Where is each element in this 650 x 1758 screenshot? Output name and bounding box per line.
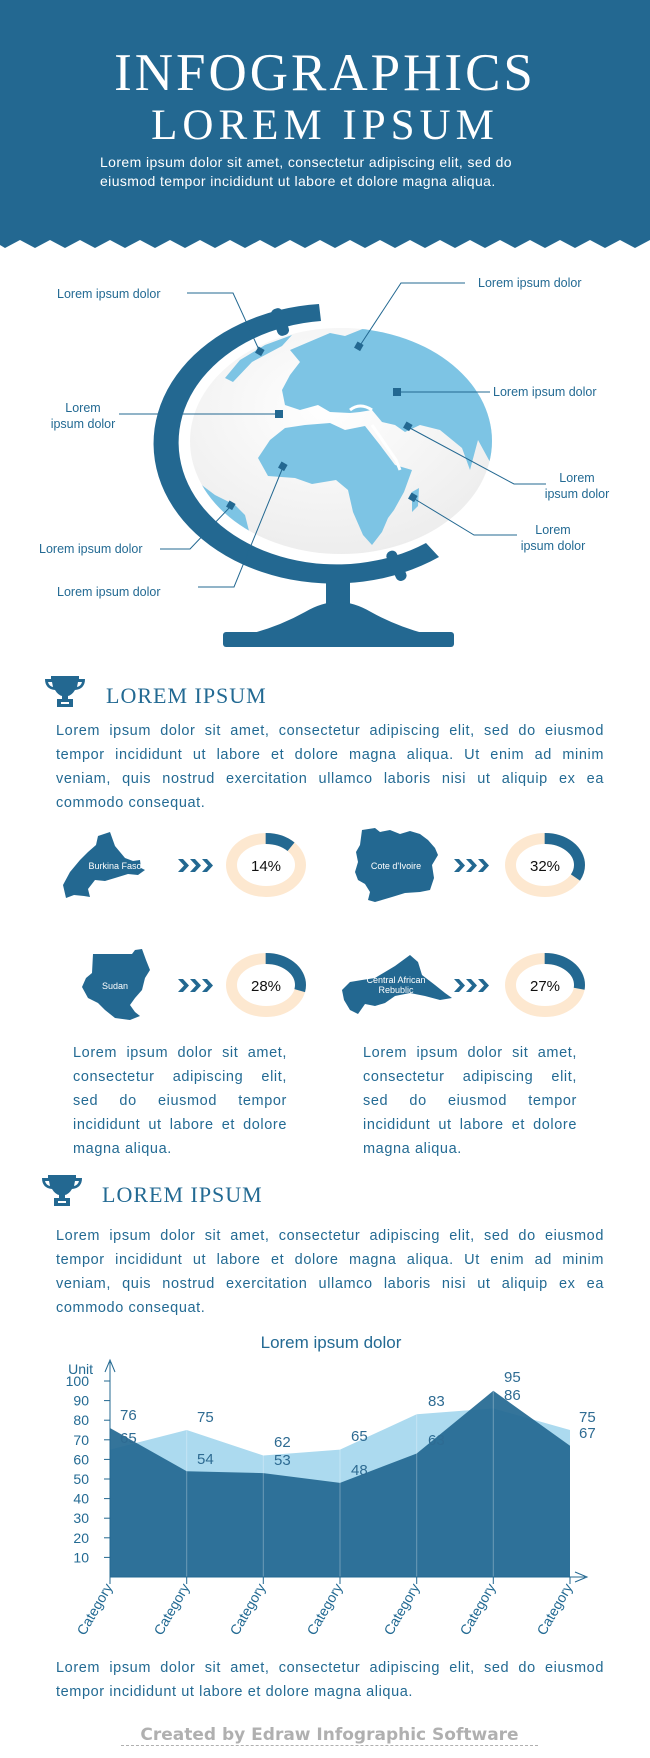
data labels: 75 bbox=[197, 1409, 214, 1426]
title: INFOGRAPHICS bbox=[114, 44, 536, 102]
Central African Republic: Rebublic bbox=[378, 985, 414, 995]
data labels: 86 bbox=[504, 1387, 521, 1404]
right column text bbox=[363, 1045, 577, 1157]
header banner bbox=[0, 0, 650, 248]
left column text: Lorem ipsum dolor sit amet, bbox=[73, 1045, 287, 1061]
globe illustration: Lorem bbox=[65, 401, 101, 415]
header intro text: eiusmod tempor incididunt ut labore et dolore magna aliqua. bbox=[100, 173, 496, 189]
y axis labels: 20 bbox=[73, 1530, 89, 1546]
data labels: 63 bbox=[428, 1432, 445, 1449]
section 2 paragraph: Lorem ipsum dolor sit amet, consectetur adipiscing elit, sed do eiusmod bbox=[56, 1228, 604, 1244]
country stats panel bbox=[63, 828, 585, 1020]
globe illustration: ipsum dolor bbox=[521, 539, 585, 553]
globe illustration bbox=[39, 276, 610, 647]
subtitle heading: LOREM IPSUM bbox=[151, 102, 499, 149]
bottom paragraph: Lorem ipsum dolor sit amet, consectetur adipiscing elit, sed do eiusmod bbox=[56, 1660, 604, 1676]
y axis labels: 80 bbox=[73, 1412, 89, 1428]
bottom paragraph: tempor incididunt ut labore et dolore magna aliqua. bbox=[56, 1684, 413, 1700]
globe stand ring bbox=[154, 304, 454, 647]
y axis labels: 50 bbox=[73, 1471, 89, 1487]
Burkina Faso bbox=[63, 832, 145, 898]
donut 28% bbox=[232, 958, 300, 1012]
data labels: 48 bbox=[351, 1462, 368, 1479]
globe illustration: Lorem ipsum dolor bbox=[39, 542, 143, 556]
area chart bbox=[66, 1333, 596, 1635]
donut 32%: 32% bbox=[530, 858, 560, 875]
data labels: 65 bbox=[351, 1428, 368, 1445]
left column text: sed do eiusmod tempor bbox=[73, 1093, 287, 1109]
globe illustration: Lorem ipsum dolor bbox=[478, 276, 582, 290]
header intro text: Lorem ipsum dolor sit amet, consectetur adipiscing elit, sed do bbox=[100, 154, 512, 170]
right column text: magna aliqua. bbox=[363, 1141, 462, 1157]
Sudan bbox=[82, 949, 150, 1020]
callout labels with leader lines bbox=[119, 283, 546, 587]
Central African Republic bbox=[342, 955, 452, 1014]
Sudan: Sudan bbox=[102, 981, 128, 991]
globe illustration: Lorem ipsum dolor bbox=[57, 287, 161, 301]
category labels bbox=[73, 1580, 576, 1638]
stand stem and base bbox=[326, 580, 350, 605]
data labels: 54 bbox=[197, 1451, 214, 1468]
light series area bbox=[110, 1408, 570, 1577]
section 2 paragraph: tempor incididunt ut labore et dolore magna aliqua. Ut enim ad minim bbox=[56, 1252, 604, 1268]
footer credit: Created by Edraw Infographic Software bbox=[140, 1725, 519, 1745]
y axis labels: Unit bbox=[68, 1361, 93, 1377]
globe illustration: ipsum dolor bbox=[51, 417, 115, 431]
section 1 paragraph: tempor incididunt ut labore et dolore magna aliqua. Ut enim ad minim bbox=[56, 747, 604, 763]
data labels: 95 bbox=[504, 1369, 521, 1386]
section 1 paragraph: veniam, quis nostrud exercitation ullamco laboris nisi ut aliquip ex ea bbox=[56, 771, 604, 787]
left column text: consectetur adipiscing elit, bbox=[73, 1069, 287, 1085]
section 2 paragraph: veniam, quis nostrud exercitation ullamco laboris nisi ut aliquip ex ea bbox=[56, 1276, 604, 1292]
right column text: Lorem ipsum dolor sit amet, bbox=[363, 1045, 577, 1061]
header intro text bbox=[100, 154, 512, 189]
icon: trophy section 1 bbox=[45, 676, 85, 707]
left column text: incididunt ut labore et dolore bbox=[73, 1117, 287, 1133]
y axis labels: 40 bbox=[73, 1491, 89, 1507]
y axis labels: 70 bbox=[73, 1432, 89, 1448]
globe illustration: Lorem ipsum dolor bbox=[57, 585, 161, 599]
donut 27% bbox=[510, 958, 580, 1012]
right column text: consectetur adipiscing elit, bbox=[363, 1069, 577, 1085]
globe illustration: Lorem bbox=[559, 471, 595, 485]
data labels: 53 bbox=[274, 1452, 291, 1469]
donut 14%: 14% bbox=[251, 858, 281, 875]
y axis labels: 100 bbox=[66, 1373, 89, 1389]
section 1 heading: LOREM IPSUM bbox=[106, 683, 267, 708]
section 1 paragraph: commodo consequat. bbox=[56, 795, 205, 811]
arrows bbox=[178, 859, 213, 872]
dark series area bbox=[110, 1391, 570, 1577]
data labels: 76 bbox=[120, 1407, 137, 1424]
section 2 paragraph: commodo consequat. bbox=[56, 1300, 205, 1316]
data labels: 83 bbox=[428, 1393, 445, 1410]
globe illustration: Lorem ipsum dolor bbox=[493, 385, 597, 399]
left column text bbox=[73, 1045, 287, 1157]
left column text: magna aliqua. bbox=[73, 1141, 172, 1157]
chart title: Lorem ipsum dolor bbox=[261, 1333, 402, 1352]
section 2 paragraph bbox=[56, 1228, 604, 1316]
bottom paragraph bbox=[56, 1660, 604, 1700]
right column text: sed do eiusmod tempor bbox=[363, 1093, 577, 1109]
Cote d'Ivoire bbox=[355, 828, 438, 902]
Burkina Faso: Burkina Faso bbox=[88, 861, 142, 871]
icon: trophy section 2 bbox=[42, 1175, 82, 1206]
data labels: 67 bbox=[579, 1425, 596, 1442]
data labels: 62 bbox=[274, 1434, 291, 1451]
donut 14% bbox=[232, 838, 300, 892]
Central African Republic: Central African bbox=[366, 975, 426, 985]
y axis labels: 30 bbox=[73, 1510, 89, 1526]
data labels bbox=[120, 1369, 596, 1479]
Cote d'Ivoire: Cote d'Ivoire bbox=[371, 861, 421, 871]
globe illustration: ipsum dolor bbox=[545, 487, 609, 501]
y axis labels: 90 bbox=[73, 1393, 89, 1409]
data labels: 65 bbox=[120, 1430, 137, 1447]
section 1 paragraph: Lorem ipsum dolor sit amet, consectetur adipiscing elit, sed do eiusmod bbox=[56, 723, 604, 739]
donut 32% bbox=[510, 838, 580, 892]
y axis labels: 60 bbox=[73, 1451, 89, 1467]
right column text: incididunt ut labore et dolore bbox=[363, 1117, 577, 1133]
donut 27%: 27% bbox=[530, 978, 560, 995]
globe illustration: Lorem bbox=[535, 523, 571, 537]
section 2 heading: LOREM IPSUM bbox=[102, 1182, 263, 1207]
axes bbox=[104, 1360, 587, 1584]
globe sphere bbox=[190, 328, 500, 554]
y axis labels: 10 bbox=[73, 1549, 89, 1565]
y axis labels bbox=[66, 1361, 93, 1565]
donut 28%: 28% bbox=[251, 978, 281, 995]
section 1 paragraph bbox=[56, 723, 604, 811]
data labels: 75 bbox=[579, 1409, 596, 1426]
